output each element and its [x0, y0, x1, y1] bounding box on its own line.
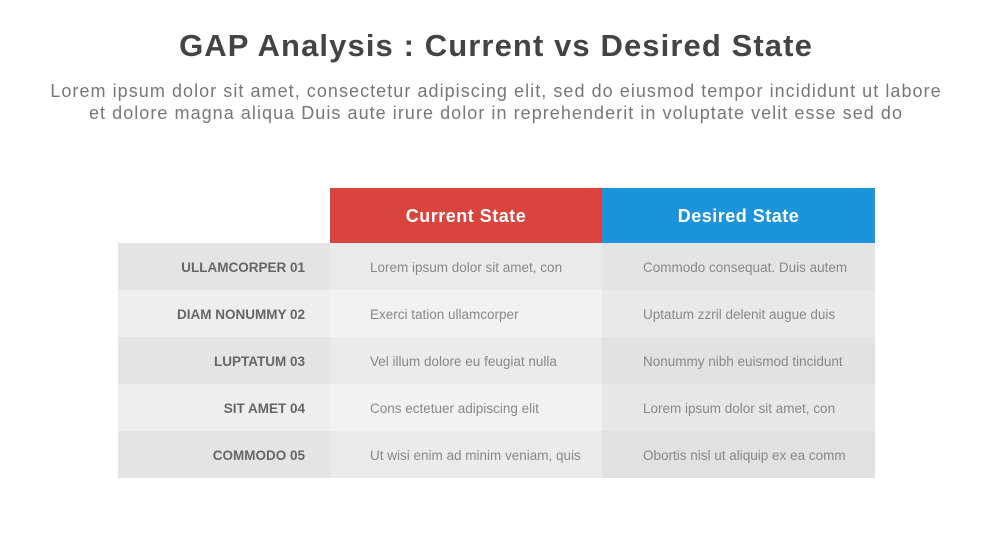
row 1 — [118, 243, 875, 290]
header: desired state: Desired State — [678, 206, 799, 226]
subtitle: Lorem ipsum dolor sit amet, consectetur adipiscing elit, sed do eiusmod tempor incididunt ut labore — [50, 81, 942, 101]
row 5: Ut wisi enim ad minim veniam, quis — [370, 448, 581, 463]
subtitle: et dolore magna aliqua Duis aute irure dolor in reprehenderit in voluptate velit esse sed do — [89, 103, 903, 123]
header: desired state — [602, 188, 875, 243]
row 5: Obortis nisl ut aliquip ex ea comm — [643, 448, 846, 463]
title: GAP Analysis : Current vs Desired State — [179, 28, 813, 63]
row 3: Nonummy nibh euismod tincidunt — [643, 354, 843, 369]
subtitle — [50, 81, 942, 123]
header: current state — [330, 188, 602, 243]
header: current state: Current State — [406, 206, 526, 226]
row 1: ULLAMCORPER 01 — [181, 260, 305, 275]
row 1: Lorem ipsum dolor sit amet, con — [370, 260, 562, 275]
row 5: COMMODO 05 — [213, 448, 305, 463]
row 1: Commodo consequat. Duis autem — [643, 260, 847, 275]
row 4: Cons ectetuer adipiscing elit — [370, 401, 539, 416]
row 4 — [118, 384, 875, 431]
row 2: Uptatum zzril delenit augue duis — [643, 307, 835, 322]
row 2 — [118, 290, 875, 337]
row 3: Vel illum dolore eu feugiat nulla — [370, 354, 557, 369]
row 3 — [118, 337, 875, 384]
row 3: LUPTATUM 03 — [214, 354, 305, 369]
row 4: SIT AMET 04 — [224, 401, 305, 416]
row 2: DIAM NONUMMY 02 — [177, 307, 305, 322]
row 2: Exerci tation ullamcorper — [370, 307, 519, 322]
row 4: Lorem ipsum dolor sit amet, con — [643, 401, 835, 416]
row 5 — [118, 431, 875, 478]
